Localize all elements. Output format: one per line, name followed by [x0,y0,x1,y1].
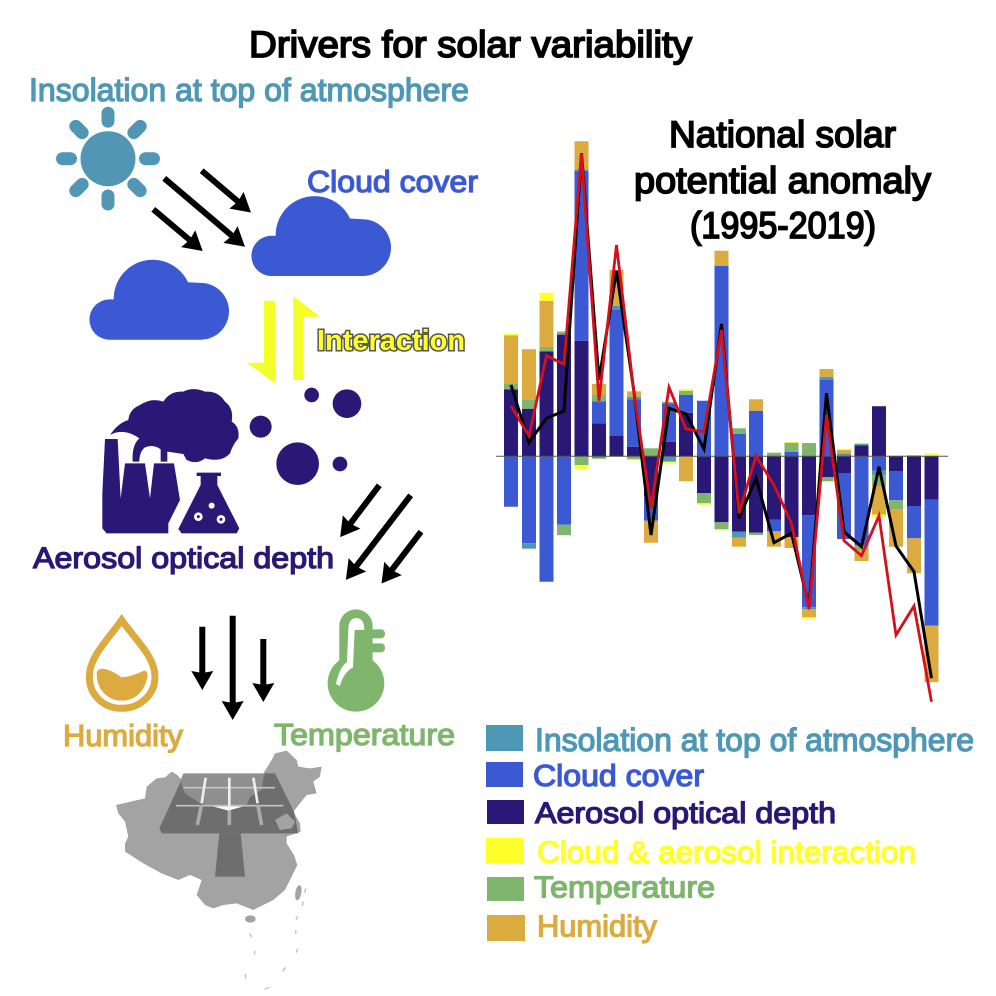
arrows: interaction (yellow) [247,296,320,383]
legend [486,722,974,944]
label: temperature: Temperature [274,717,455,752]
label: interaction: Interaction [317,325,465,357]
legend item: insolation: Insolation at top of atmosphere [535,722,974,758]
stacked bars [511,141,932,682]
heading: national solar potential anomaly: National solar [669,114,896,155]
legend item: aerosol optical depth: Aerosol optical depth [535,797,836,830]
arrows: aerosol to surface [350,485,421,570]
legend item: interaction: Cloud & aerosol interaction [537,835,916,870]
bar chart: solar anomaly [496,141,948,702]
line: black total [511,153,932,678]
heading: insolation: Insolation at top of atmosphere [29,72,469,108]
label: humidity: Humidity [63,718,183,753]
title: Drivers for solar variability [249,24,693,65]
line: red total [511,154,932,702]
arrows: sunlight [153,171,238,240]
arrows: downward [202,616,263,703]
heading: national solar potential anomaly: (1995-2019) [690,205,876,246]
heading: national solar potential anomaly [634,114,932,246]
heading: aerosol optical depth: Aerosol optical depth [33,542,334,575]
icon: cloud left [89,260,229,340]
icon: thermometer [328,609,385,712]
zero axis [496,455,948,457]
icon: cloud right [251,196,391,276]
legend item: temperature: Temperature [534,870,715,905]
legend item: humidity: Humidity [537,909,657,944]
heading: cloud cover: Cloud cover [307,164,478,199]
icon: factory and flask with aerosols [102,388,361,533]
heading: national solar potential anomaly: potential anomaly [634,160,932,201]
icon: sun [56,107,160,210]
icon: humidity droplet [89,620,155,708]
legend item: cloud cover: Cloud cover [533,758,704,793]
map: China with solar panel [116,751,322,989]
